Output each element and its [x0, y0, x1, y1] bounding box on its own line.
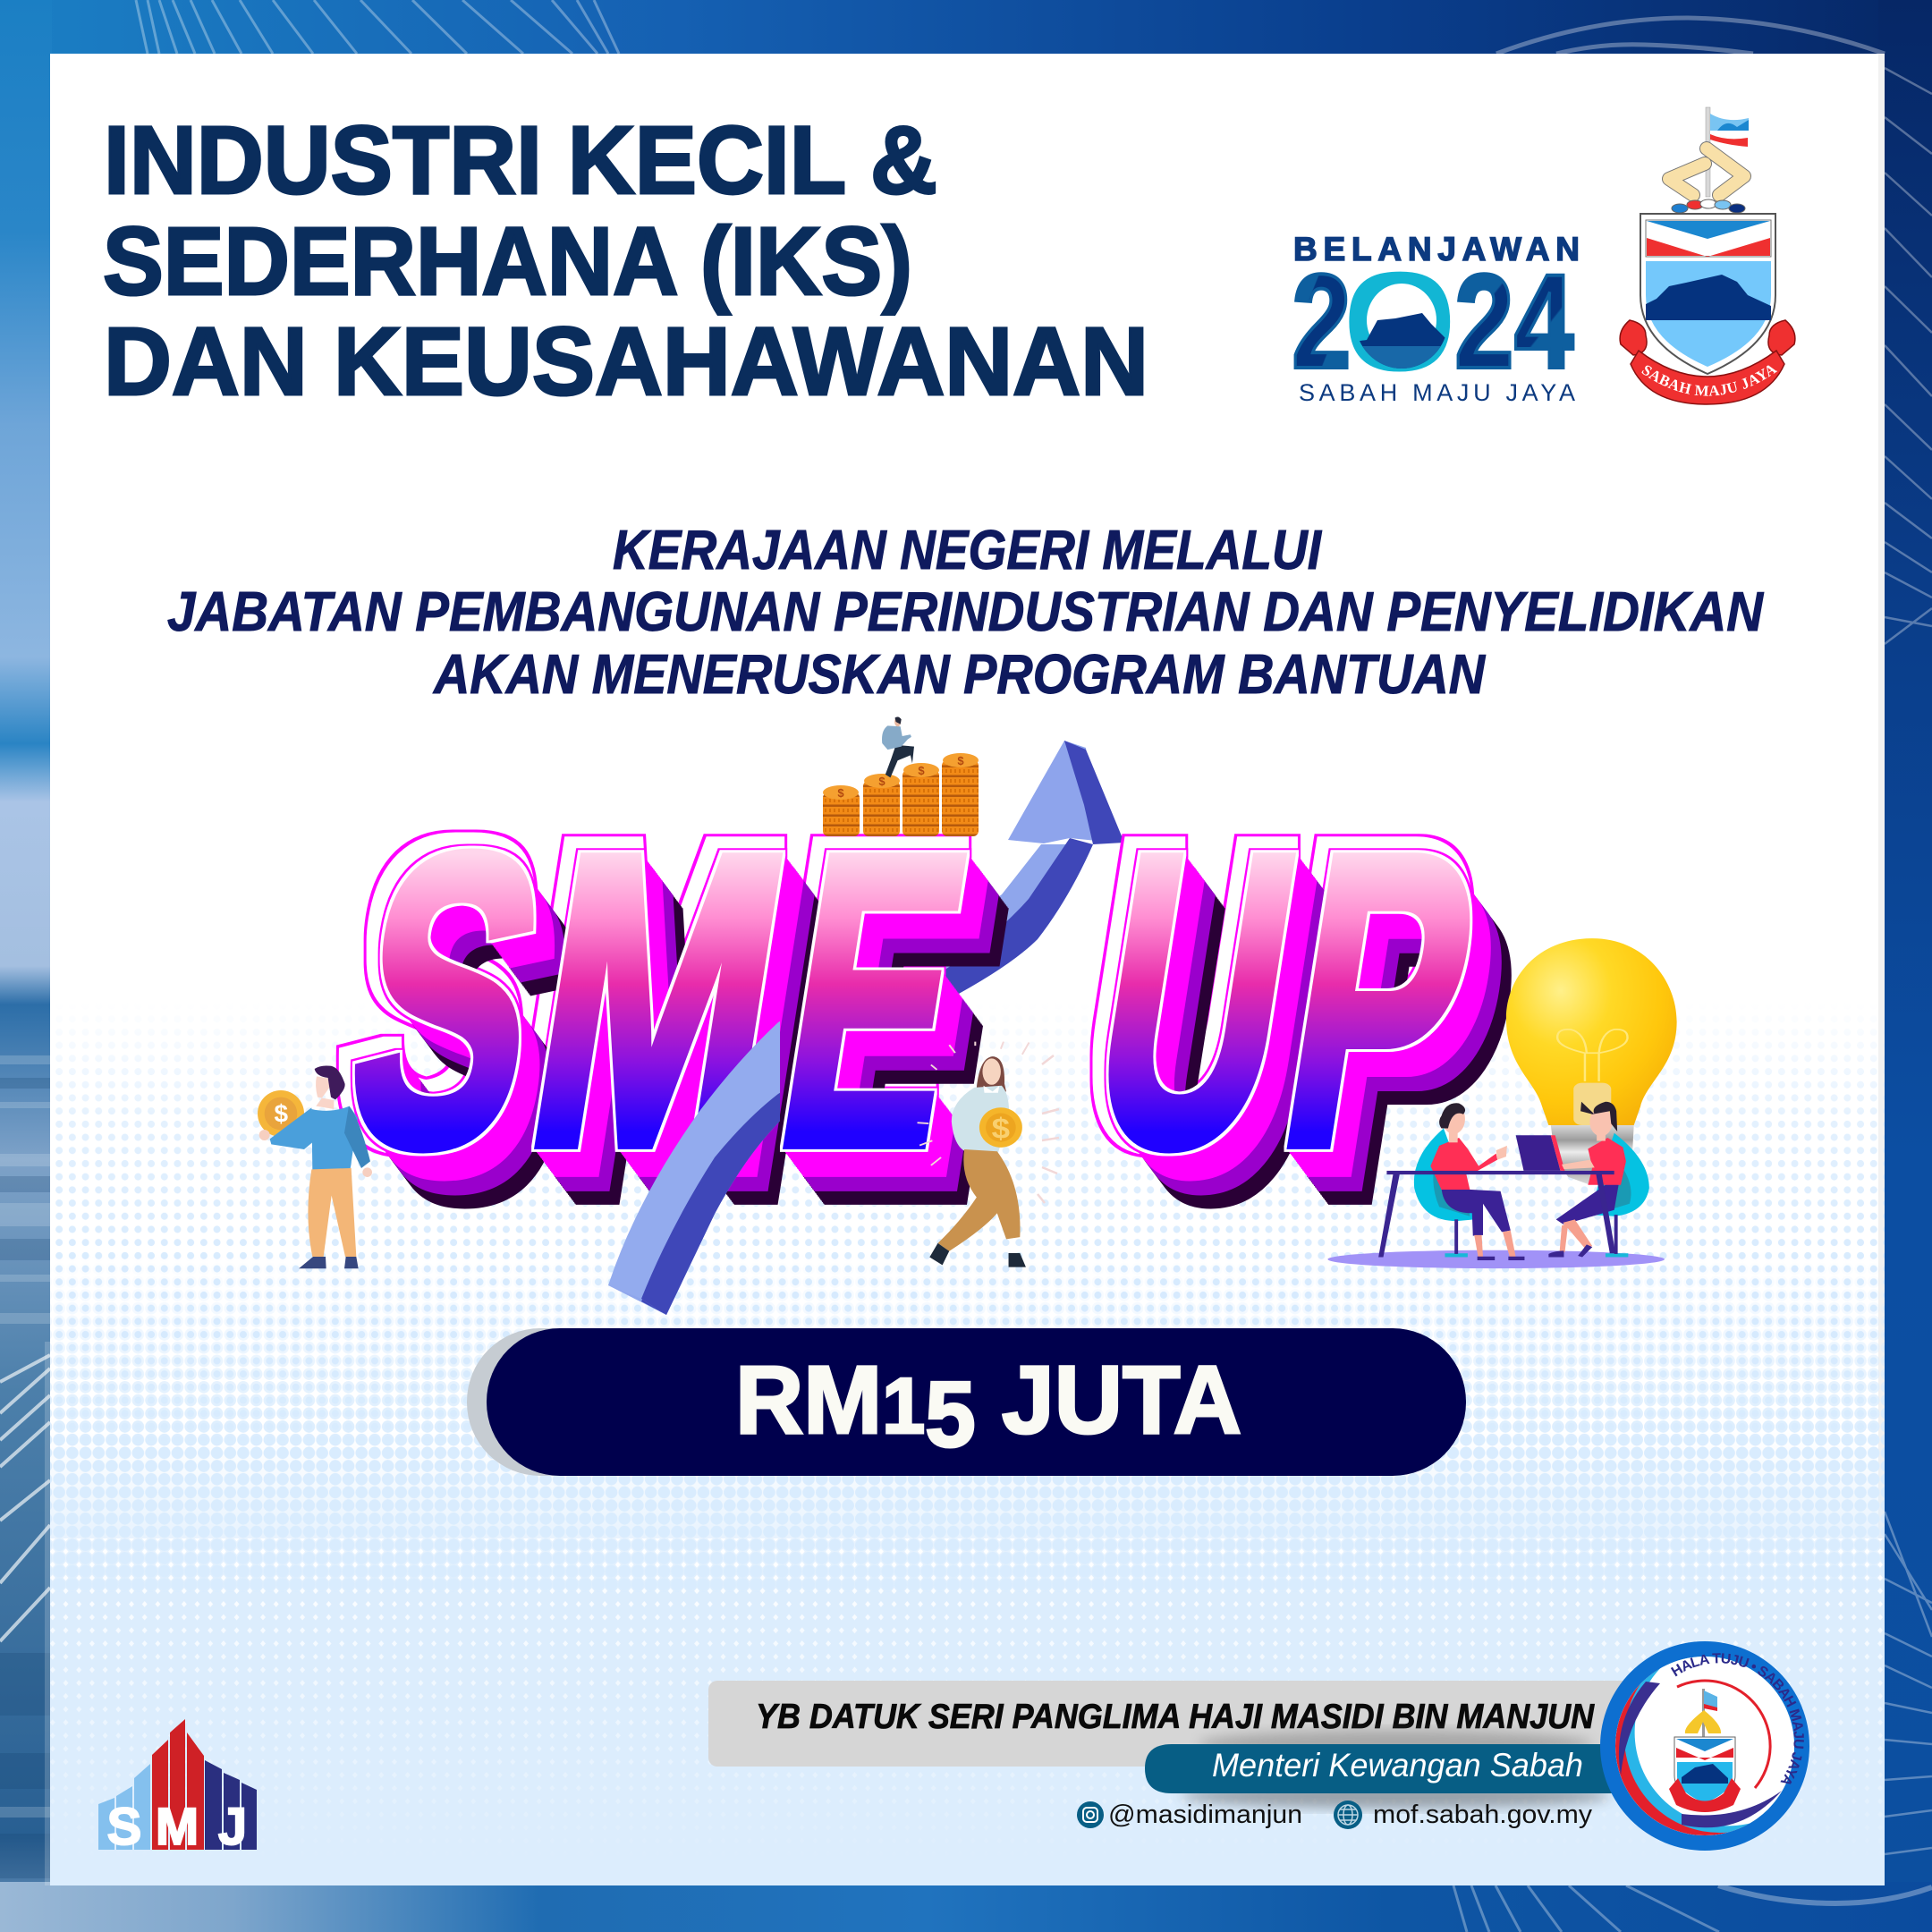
beads [1672, 199, 1745, 213]
icon: instagram [1077, 1801, 1104, 1828]
sparks beside woman [1038, 1055, 1059, 1203]
minister title pill [1145, 1730, 1628, 1809]
arrow: front section over the letters [608, 1021, 780, 1315]
logo: Belanjawan 2024: BELANJAWAN [1293, 231, 1580, 267]
coin stacks: $ [837, 786, 844, 800]
logo: Belanjawan 2024: 0 [1341, 242, 1459, 401]
3D lettering: SME UP: E [758, 768, 991, 1231]
title [103, 106, 1148, 415]
logo: Belanjawan 2024: 24 [1454, 246, 1573, 396]
3D lettering: SME UP: M [506, 770, 810, 1232]
intro text block: JABATAN PEMBANGUNAN PERINDUSTRIAN DAN PENYELIDIKAN [167, 581, 1764, 643]
intro text block: KERAJAAN NEGERI MELALUI [613, 520, 1323, 581]
logo: Belanjawan 2024 [1292, 231, 1580, 406]
badge: Hala Tuju Sabah Maju Jaya [1600, 1641, 1809, 1851]
figures: two people at a table [1327, 1102, 1665, 1268]
arrow: growth arrow behind letters [608, 741, 1124, 1315]
title: DAN KEUSAHAWANAN [104, 307, 1148, 415]
minister name bar: YB DATUK SERI PANGLIMA HAJI MASIDI BIN MANJUN [756, 1698, 1595, 1736]
3D lettering: SME UP: P [1261, 769, 1501, 1231]
light bulb [1506, 938, 1677, 1185]
figure: man holding coin: $ [275, 1100, 289, 1128]
title: INDUSTRI KECIL & [104, 106, 937, 214]
coin stacks [823, 753, 979, 836]
social handles: @masidimanjun [1108, 1801, 1302, 1829]
amount: RM15 JUTA: RM1 [735, 1345, 926, 1453]
minister title pill: Menteri Kewangan Sabah [1212, 1747, 1583, 1784]
logo: SMJ [98, 1719, 257, 1856]
coin stacks: $ [957, 754, 964, 767]
social handles: mof.sabah.gov.my [1373, 1801, 1593, 1829]
3D lettering: SME UP [326, 768, 1501, 1232]
icon: globe [1334, 1801, 1362, 1829]
3D lettering: SME UP: S [326, 769, 569, 1232]
logo: Belanjawan 2024: 2 [1292, 246, 1352, 396]
figure: woman carrying coin [918, 1042, 1029, 1267]
arms holding the pole [1669, 148, 1744, 195]
logo: Sabah coat of arms [1619, 107, 1796, 405]
ribbon: motto: SABAH MAJU JAYA [1641, 365, 1778, 396]
coin stacks: $ [918, 764, 925, 777]
minister name bar [708, 1681, 1639, 1767]
coin stacks: $ [878, 775, 886, 788]
social handles [1077, 1801, 1593, 1829]
badge: Hala Tuju Sabah Maju Jaya: HALA TUJU • SABAH MAJU JAYA [1671, 1653, 1804, 1784]
logo: SMJ: J [218, 1798, 247, 1856]
shield [1640, 214, 1775, 374]
mini coat of arms [1669, 1689, 1741, 1812]
figure: man climbing coins [882, 716, 914, 777]
figure: man holding coin [258, 1065, 372, 1268]
3D lettering: SME UP: U [1070, 770, 1320, 1232]
ribbon: motto [1619, 319, 1796, 405]
logo: SMJ: S [107, 1798, 141, 1856]
amount: RM15 JUTA: JUTA [976, 1345, 1241, 1453]
amount pill [467, 1328, 1466, 1476]
logo: Belanjawan 2024: SABAH MAJU JAYA [1299, 379, 1575, 406]
intro text block: AKAN MENERUSKAN PROGRAM BANTUAN [432, 644, 1486, 706]
title: SEDERHANA (IKS) [103, 207, 912, 315]
intro text block [167, 520, 1764, 706]
figure: woman carrying coin: $ [992, 1114, 1010, 1145]
logo: SMJ: M [156, 1798, 199, 1856]
flag and pole [1706, 107, 1749, 197]
amount: RM15 JUTA: 5 [925, 1363, 976, 1467]
